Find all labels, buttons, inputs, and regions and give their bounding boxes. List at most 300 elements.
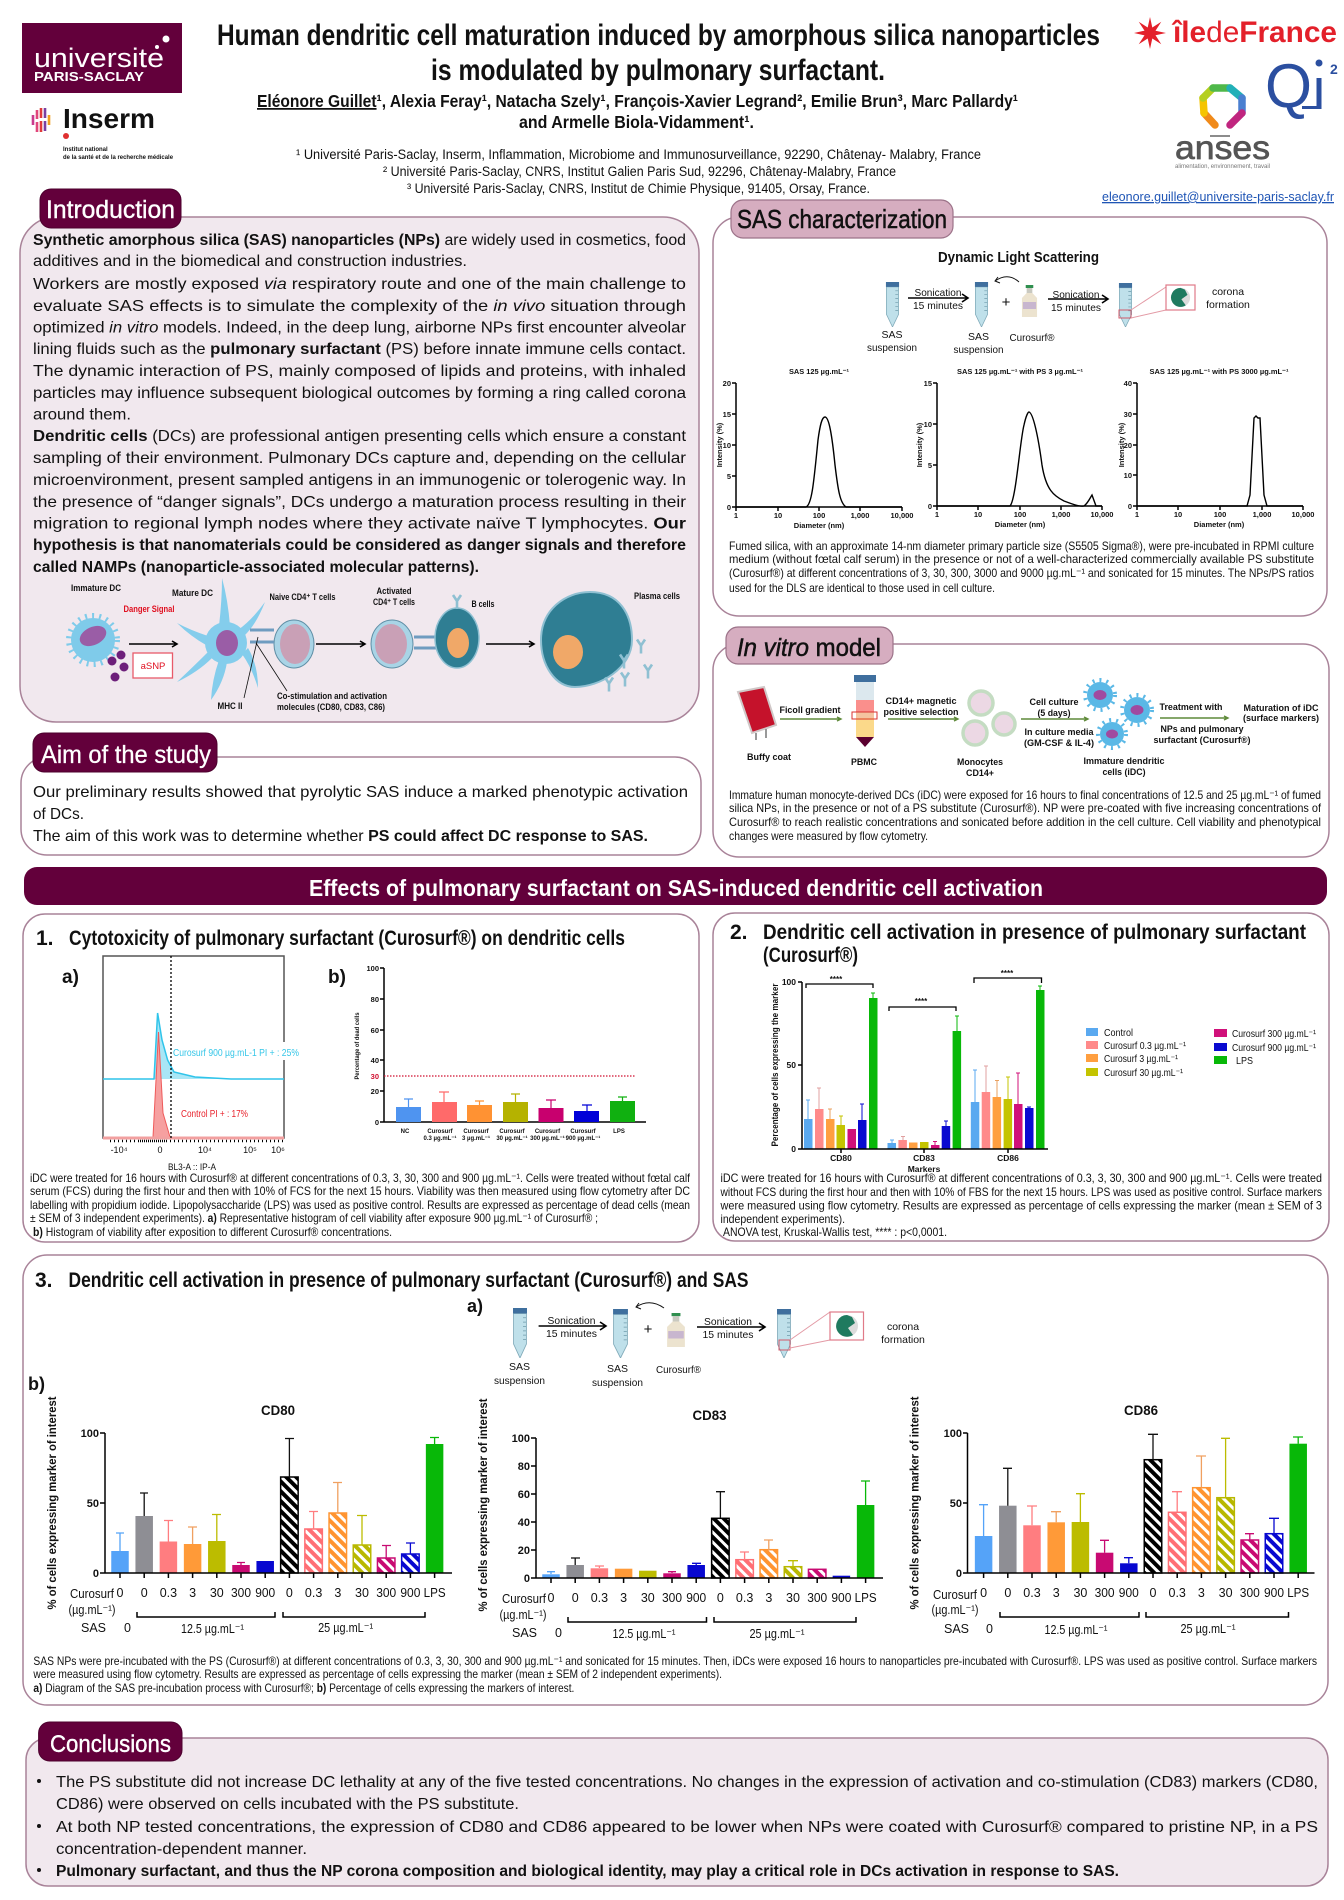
chart: SAS 125 with PS 3000: 30 [1124,410,1132,419]
chart: percentage of dead cells: 0 [375,1118,379,1127]
heading: In vitro model [726,627,893,664]
legend: Curosurf 0.3 µg.mL⁻¹ [1104,1041,1187,1052]
chart: CD80: 0 [286,1586,293,1600]
authors [257,91,1018,132]
chart: CD80: (µg.mL⁻¹) [68,1603,116,1617]
chart: SAS 125 with PS 3000 [1117,367,1314,529]
legend: Curosurf 300 µg.mL⁻¹ [1232,1029,1317,1040]
caption: panel 1: b) Histogram of viability after exposition to different Curosurf® concentrations. [33,1225,392,1239]
legend: Curosurf 3 µg.mL⁻¹ [1104,1054,1179,1065]
sonication flow diagram: SAS [509,1361,530,1373]
flow labels: Buffy coat [747,752,791,762]
chart: SAS 125 with PS 3: Intensity (%) [915,422,924,467]
chart: percentage of dead cells: 60 [371,1026,379,1035]
chart: CD83: 300 [662,1591,682,1605]
axis labels: 10⁶ [271,1145,285,1155]
sonication flow diagram [494,1303,925,1389]
chart: CD83: 12.5 µg.mL⁻¹ [612,1627,676,1641]
flow labels: (5 days) [1038,708,1071,718]
introduction text: Dendritic cells (DCs) are professional antigen presenting cells which ensure a constant [33,428,687,445]
sonication flow diagram: suspension [954,344,1004,356]
heading 1: 1. [36,927,54,950]
chart: CD83: 100 [512,1433,530,1445]
chart: CD80: 12.5 µg.mL⁻¹ [181,1622,244,1636]
chart: percentage of dead cells: Curosurf [499,1129,526,1135]
heading: Conclusions [39,1722,182,1761]
chart: CD80: 300 [231,1586,251,1600]
chart: CD80: LPS [424,1586,446,1600]
label: Curosurf PI: Curosurf 900 µg.mL-1 PI + : 25% [173,1047,299,1059]
chart: CD83: 0.3 [736,1591,753,1605]
chart: markers bar chart: 100 [782,977,796,987]
logo: Qi2: 2 [1330,61,1338,77]
tube with zoom [777,1309,864,1358]
label b: b) [328,967,346,988]
flow labels: positive selection [884,707,958,717]
chart: percentage of dead cells: 30 µg.mL⁻¹ [496,1135,528,1142]
sonication flow diagram: SAS [881,329,903,341]
sonication flow diagram: Sonication [1052,289,1100,301]
chart: percentage of dead cells: 80 [371,995,379,1004]
caption: panel 2 [720,1171,1322,1239]
caption: panel 1: iDC were treated for 16 hours with Curosurf® at different concentrations of 0.3, 3, 30, 300 and 900 µg.mL⁻¹. Cells were treated without fœtal calf [30,1171,691,1185]
chart: CD83: 25 µg.mL⁻¹ [750,1627,804,1641]
sonication flow diagram: 15 minutes [546,1328,597,1340]
chart: SAS 125 with PS 3000: 10 [1124,471,1132,480]
naive T cell [250,620,314,668]
pointer lines [244,637,287,698]
chart: CD83: 0 [524,1573,530,1585]
legend: Control [1104,1028,1133,1039]
caption: SAS characterization [729,539,1314,595]
chart: SAS 125: Intensity (%) [715,422,724,467]
cell labels: CD4⁺ T cells [373,597,415,607]
chart: SAS 125: 10,000 [891,511,913,520]
chart: CD83: 0 [717,1591,724,1605]
chart: CD80: 30 [355,1586,369,1600]
chart: CD80: SAS [81,1621,106,1635]
chart: CD80: 0.3 [305,1586,322,1600]
bottle [667,1313,685,1347]
introduction text: optimized in vitro models. Indeed, in the deep lung, airborne NPs first encounter alveolar [33,320,687,336]
title: Human dendritic cell maturation induced by amorphous silica nanoparticles [217,19,1100,52]
logo: Inserm: Institut national [63,147,108,153]
cell labels [71,583,680,712]
sonication flow diagram: formation [1206,299,1250,311]
logo: Inserm [33,103,174,161]
sonication flow diagram: corona [887,1321,919,1333]
flow labels: (GM-CSF & IL-4) [1024,738,1094,748]
tube [975,282,988,327]
sonication flow diagram: Curosurf® [656,1364,701,1376]
chart: percentage of dead cells: Curosurf [535,1129,561,1135]
heading: Aim of the study: Aim of the study [41,741,211,769]
chart: SAS 125 with PS 3000: SAS 125 µg.mL⁻¹ with PS 3000 µg.mL⁻¹ [1150,367,1289,376]
bullet list: Pulmonary surfactant, and thus the NP corona composition and biological identity, may play a critical role in DCs activation in response to SAS. [56,1863,1119,1880]
chart: SAS 125 [715,367,913,530]
introduction text: around them. [33,406,131,424]
label a: a) [467,1296,483,1316]
significance brackets [806,969,1042,1011]
logo: Université Paris-Saclay: universite [34,43,164,73]
chart: CD80: % of cells expressing marker of interest [47,1396,59,1610]
chart: SAS 125: 10 [723,441,731,450]
chart: SAS 125: 1,000 [851,511,869,520]
caption: panel 1 [30,1171,691,1239]
chart: markers bar chart: Markers [908,1164,941,1174]
label a: a) [62,967,79,988]
chart: SAS 125 with PS 3: 0 [928,502,932,511]
flow labels: Monocytes [957,757,1003,767]
chart: CD86: 30 [1073,1586,1087,1600]
cell labels: molecules (CD80, CD83, C86) [277,702,385,712]
chart: SAS 125 with PS 3: Diameter (nm) [995,520,1046,529]
chart: CD86: 0 [956,1568,962,1580]
chart: CD83 [478,1398,883,1641]
panel: introduction [20,189,699,722]
flow labels: CD14+ [966,768,994,778]
chart: CD80: 50 [87,1498,99,1510]
logo: Qi2: Q [1265,52,1312,121]
curved arrow [995,277,1019,283]
flow labels: surfactant (Curosurf®) [1154,735,1250,745]
chart: CD83: % of cells expressing marker of interest [478,1398,490,1612]
chart: CD80: 0 [93,1568,99,1580]
label b: b) [28,1374,45,1394]
authors: Eléonore Guillet¹, Alexia Feray¹, Natacha Szely¹, François-Xavier Legrand², Emilie Brun³, Marc Pallardy¹ [257,91,1018,111]
chart: markers bar chart: CD83 [913,1153,935,1163]
chart: SAS 125: SAS 125 µg.mL⁻¹ [789,367,849,376]
chart: CD80: 3 [334,1586,341,1600]
logo: Université Paris-Saclay [22,23,182,93]
chart: CD83: CD83 [692,1408,727,1423]
flow labels: Ficoll gradient [780,705,840,715]
introduction text: the presence of “danger signals”, DCs undergo a maturation process resulting in their [33,494,687,511]
tube [613,1309,628,1358]
logo: Inserm: de la santé et de la recherche médicale [63,155,174,161]
chart: CD86: 0 [980,1586,987,1600]
chart: SAS 125 with PS 3000: 0 [1128,502,1132,511]
panel: conclusions [26,1722,1328,1886]
introduction text: lining fluids such as the pulmonary surfactant (PS) before innate immune cells contact. [33,341,686,358]
caption: panel 1: ± SEM of 3 independent experiments). a) Representative histogram of cell viability after exposure 900 µg.mL⁻¹ of Curosurf® ; [30,1211,598,1225]
chart: CD80: 300 [376,1586,396,1600]
introduction text: The dynamic interaction of PS, mainly composed of lipids and proteins, with inhaled [33,363,686,380]
affiliations: ² Université Paris-Saclay, CNRS, Institut Galien Paris Sud, 92296, Châtenay-Malabry, France [383,164,896,179]
icon: PBMC tube [852,675,877,747]
chart: CD86: % of cells expressing marker of interest [910,1396,922,1610]
immature dendritic cell [69,616,117,664]
significance brackets: **** [915,997,928,1006]
heading 3: Dendritic cell activation in presence of pulmonary surfactant (Curosurf®) and SAS [68,1269,748,1292]
sonication flow diagram: 15 minutes [702,1329,754,1341]
chart: SAS 125 with PS 3000: 20 [1124,441,1132,450]
heading: SAS characterization: SAS characterization [737,204,947,234]
chart: CD86: LPS [1287,1586,1309,1600]
affiliations: ¹ Université Paris-Saclay, Inserm, Inflammation, Microbiome and Immunosurveillance, 92290, Châtenay- Malabry, France [296,147,981,162]
curved arrow [636,1303,664,1309]
chart: CD80: 25 µg.mL⁻¹ [318,1621,373,1635]
label: Curosurf PI [172,1042,302,1060]
flow labels: Immature dendritic [1084,756,1164,766]
logo: Île-de-France: îledeFrance [1171,16,1337,49]
sonication flow diagram: formation [881,1334,925,1346]
caption: in vitro model: changes were measured by flow cytometry. [729,829,928,843]
heading: Aim of the study [33,733,217,772]
caption: panel 3 [33,1654,1317,1695]
icon: blood bag [738,687,776,740]
chart: percentage of dead cells [354,964,646,1142]
chart: percentage of dead cells: 3 µg.mL⁻¹ [462,1135,490,1142]
chart: CD83: 900 [831,1591,851,1605]
chart: CD86: 900 [1119,1586,1139,1600]
panel 2: DC activation with surfactant [713,913,1329,1241]
caption: panel 2: independent experiments). [720,1212,845,1226]
axis labels: 10⁵ [243,1145,257,1155]
chart: CD86: 3 [1198,1586,1205,1600]
caption: in vitro model [729,788,1322,843]
icon: immature dendritic cells [1085,680,1152,748]
arrow [1048,295,1108,303]
sonication flow diagram: corona [1212,286,1244,298]
panel: in vitro model [713,627,1329,857]
chart: percentage of dead cells: 30 [371,1072,379,1081]
axis labels: -10⁴ [111,1145,128,1155]
chart: CD83: 30 [786,1591,800,1605]
chart: SAS 125: 0 [727,503,731,512]
chart: SAS 125: Diameter (nm) [794,521,845,530]
chart: CD86: 3 [1053,1586,1060,1600]
heading 2 [730,921,1306,967]
chart: CD80: 0.3 [160,1586,177,1600]
tube [886,282,899,327]
chart: SAS 125 with PS 3: 100 [1014,510,1026,519]
chart: CD80: 0 [124,1621,131,1635]
axis labels [111,1145,285,1172]
caption: panel 3: a) Diagram of the SAS pre-incubation process with Curosurf®; b) Percentage of cells expressing the markers of interest. [33,1681,574,1695]
chart: percentage of dead cells: Curosurf [570,1129,597,1135]
logo: Anses: anses [1175,129,1270,166]
bullet list: concentration-dependent manner. [56,1841,307,1858]
significance brackets: **** [830,975,843,984]
chart: CD83: 0 [555,1626,562,1640]
aim text: of DCs. [33,806,84,823]
chart: CD80: CD80 [261,1403,295,1418]
label: Control PI: Control PI + : 17% [181,1108,248,1120]
heading 3: 3. [35,1269,53,1292]
chart: percentage of dead cells: Curosurf [463,1129,490,1135]
chart: CD83: SAS [512,1626,537,1640]
chart: CD86: 0 [986,1622,993,1636]
chart: SAS 125 with PS 3: 10 [924,420,932,429]
silica nanoparticles [108,650,128,682]
arrow [129,641,177,647]
introduction text: evaluate SAS effects is to simulate the complexity of the in vivo situation through [33,298,686,315]
activated T cell [371,620,436,668]
logo: Anses [1175,88,1270,170]
chart: CD86: 0 [1004,1586,1011,1600]
chart: CD83: 30 [641,1591,655,1605]
chart: CD80 [47,1396,452,1636]
significance brackets: **** [1001,969,1014,978]
chart: CD80: 900 [400,1586,420,1600]
chart: markers bar chart: 0 [791,1144,796,1154]
chart: CD83: LPS [855,1591,877,1605]
panel 3: DC activation with surfactant and SAS [23,1255,1328,1705]
introduction text: additives and in the biomedical and construction industries. [33,253,467,270]
sonication flow diagram: 15 minutes [913,300,963,312]
B cell [435,595,479,668]
introduction text [33,232,687,576]
cell labels: Activated [376,586,412,596]
chart: CD80: Curosurf [70,1587,114,1601]
logo: Université Paris-Saclay: PARIS-SACLAY [34,70,145,84]
sonication flow diagram: SAS [607,1363,628,1375]
panel: SAS characterization [713,200,1327,616]
chart: CD83: 20 [518,1545,530,1557]
introduction text: hypothesis is that nanomaterials could be considered as danger signals and therefore [33,537,686,554]
arrow [908,294,968,302]
chart: CD86: 25 µg.mL⁻¹ [1180,1622,1236,1636]
aSNP box: aSNP [141,661,165,672]
chart: SAS 125 with PS 3000: 1 [1135,510,1139,519]
chart: CD86: 12.5 µg.mL⁻¹ [1044,1623,1108,1637]
sonication flow diagram: + [644,1321,653,1338]
banner: effects heading [24,867,1327,905]
chart: percentage of dead cells: NC [401,1129,410,1135]
chart: CD83: 3 [620,1591,627,1605]
chart: CD80: 100 [81,1428,99,1440]
chart: SAS 125 with PS 3000: Intensity (%) [1117,422,1126,467]
bullet list [37,1774,1318,1880]
introduction text: particles may influence subsequent biological outcomes by forming a ring called corona [33,385,686,402]
chart: CD83: 300 [807,1591,827,1605]
sonication flow diagram: suspension [867,342,917,354]
sonication flow diagram: Sonication [914,287,962,299]
chart: SAS 125 with PS 3000: Diameter (nm) [1194,520,1245,529]
title [217,19,1100,87]
chart: CD83: 40 [518,1517,530,1529]
heading: In vitro model: In vitro model [737,634,881,662]
caption: panel 1: serum (FCS) during the first hour and then with 10% of FCS for the next 15 hours. Viability was then measured using flow cytometry after DC [30,1184,690,1198]
bars CD86 [971,986,1044,1149]
sonication flow diagram: suspension [494,1375,545,1387]
caption: SAS characterization: medium (without fœtal calf serum) in the presence or not of a well-characterized commercially available PS substitute [729,552,1314,566]
caption: panel 3: were measured using flow cytometry. Results are expressed as percentage of cells expressing the marker (mean ± SEM of 2 independent experiments). [33,1667,722,1681]
sonication flow diagram: Curosurf® [1010,332,1055,344]
heading: Conclusions: Conclusions [50,1731,171,1758]
chart: CD83: 0 [572,1591,579,1605]
logo: Qi2 [1265,52,1338,121]
chart: SAS 125: 15 [723,410,731,419]
sonication flow diagram: SAS [968,331,989,343]
chart: percentage of dead cells: Percentage of dead cells [354,1012,361,1080]
arrow [486,641,534,647]
chart: SAS 125 with PS 3 [915,367,1113,529]
chart: CD83: 60 [518,1489,530,1501]
legend [1086,1028,1317,1079]
chart: CD83: 3 [765,1591,772,1605]
heading: Dynamic Light Scattering: Dynamic Light Scattering [938,249,1099,266]
introduction text: called NAMPs (nanoparticle-associated molecular patterns). [33,559,479,576]
bottle [1022,285,1037,317]
aSNP box [133,653,172,678]
chart: SAS 125: 1 [734,511,738,520]
flow labels: Cell culture [1030,697,1078,707]
axis labels: 0 [157,1145,163,1155]
chart: markers bar chart: CD80 [830,1153,852,1163]
sonication flow diagram: suspension [592,1377,643,1389]
chart: SAS 125 with PS 3: SAS 125 µg.mL⁻¹ with PS 3 µg.mL⁻¹ [957,367,1083,376]
aim text: The aim of this work was to determine whether PS could affect DC response to SAS. [33,828,648,845]
chart: percentage of dead cells: 40 [371,1056,379,1065]
sonication flow diagram [867,277,1250,356]
chart: percentage of dead cells: 20 [371,1087,379,1096]
chart: SAS 125: 20 [723,379,731,388]
chart: flow cytometry histogram [103,956,302,1172]
chart: CD80: 3 [189,1586,196,1600]
chart: percentage of dead cells: 900 µg.mL⁻¹ [566,1135,600,1142]
chart: CD86: 900 [1264,1586,1284,1600]
chart: CD86: 300 [1240,1586,1260,1600]
introduction text: Synthetic amorphous silica (SAS) nanoparticles (NPs) are widely used in cosmetics, food [33,232,686,249]
chart: CD86: 0.3 [1023,1586,1041,1600]
affiliations [296,147,981,196]
chart: SAS 125 with PS 3000: 10,000 [1292,510,1314,519]
chart: percentage of dead cells: Curosurf [427,1129,454,1135]
legend: Curosurf 900 µg.mL⁻¹ [1232,1043,1317,1054]
heading 1: Cytotoxicity of pulmonary surfactant (Curosurf®) on dendritic cells [69,927,625,950]
flow labels: PBMC [851,757,877,767]
tube with zoom [1119,283,1195,327]
cell labels: Plasma cells [634,591,680,601]
cell labels: B cells [472,599,494,609]
chart: SAS 125 with PS 3: 5 [928,461,932,470]
logo: Anses: alimentation, environnement, travail [1175,164,1270,170]
chart: SAS 125 with PS 3000: 100 [1214,510,1226,519]
chart: CD86: 0.3 [1169,1586,1186,1600]
chart: CD83: 0 [548,1591,555,1605]
email contact: eleonore.guillet@universite-paris-saclay.fr [1102,189,1335,204]
banner: effects heading: Effects of pulmonary surfactant on SAS-induced dendritic cell activation [309,875,1043,901]
axis labels: 10⁴ [198,1145,212,1155]
chart: CD86: 30 [1219,1586,1233,1600]
flow labels: CD14+ magnetic [886,696,956,706]
chart: percentage of dead cells: LPS [613,1129,625,1135]
chart: CD86: (µg.mL⁻¹) [932,1603,978,1617]
chart: SAS 125 with PS 3000: 10 [1174,510,1182,519]
bullet list: At both NP tested concentrations, the expression of CD80 and CD86 appeared to be lower when NPs were coated with Curosurf® compared to pristine NP, in a PS [56,1819,1318,1836]
chart: CD83: 900 [686,1591,706,1605]
chart: CD83: 0.3 [591,1591,608,1605]
flow labels: NPs and pulmonary [1160,724,1244,734]
tube [513,1308,527,1358]
chart: SAS 125 with PS 3000: 40 [1124,379,1132,388]
introduction text: microenvironment, present sampled antigens in an immunogenic or tolerogenic way. In [33,472,686,489]
bars CD80 [804,993,878,1149]
axis labels: BL3-A :: IP-A [168,1162,216,1172]
introduction text: Workers are mostly exposed via respiratory route and one of the main challenge to [33,276,686,293]
flow labels: In culture media [1024,727,1094,737]
chart: CD86: SAS [944,1622,969,1636]
arrow [539,1322,606,1330]
flow labels: (surface markers) [1243,713,1319,723]
sonication flow diagram: Sonication [704,1316,752,1328]
sonication flow diagram: Sonication [548,1315,596,1327]
chart: CD83: (µg.mL⁻¹) [500,1608,546,1622]
aim text [33,784,688,845]
flow labels: Maturation of iDC [1244,703,1319,713]
